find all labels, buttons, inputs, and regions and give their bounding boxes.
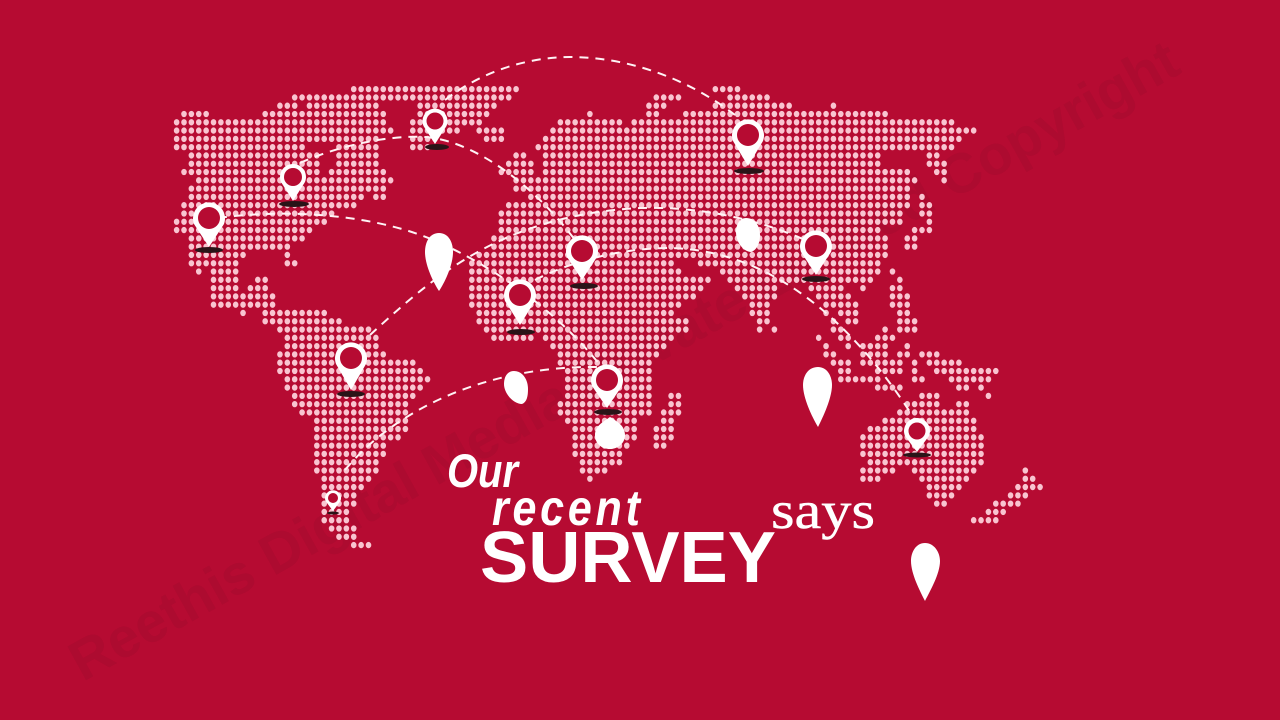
text: says: says	[771, 482, 875, 540]
drop: Southern Africa	[595, 417, 625, 449]
drop: Atlantic	[425, 233, 453, 291]
drop: Central Asia	[736, 218, 760, 252]
pin: Australia	[903, 418, 931, 458]
text: SURVEY: SURVEY	[480, 518, 776, 598]
text: recent: recent	[492, 480, 642, 536]
dashed route lines	[218, 57, 910, 470]
dotted world map	[177, 89, 1044, 545]
pin: West Africa	[504, 279, 536, 335]
drop: Gulf of Guinea	[504, 371, 528, 404]
pin: California	[193, 202, 225, 253]
pin: Russia	[732, 119, 764, 174]
watermark: Reethis Digital Media Private Limited Copyright	[58, 27, 1189, 692]
pin: South America	[335, 342, 367, 397]
drop: South Ocean	[911, 543, 940, 601]
pin: Central Africa	[591, 364, 623, 415]
pin: Greenland	[422, 109, 449, 150]
pin: Middle East	[566, 235, 598, 289]
pin: Chile	[325, 490, 341, 514]
pin: China	[800, 230, 832, 282]
pin: Canada	[279, 164, 309, 207]
drop: Indian Ocean	[803, 367, 832, 427]
text: Our: Our	[447, 444, 520, 497]
